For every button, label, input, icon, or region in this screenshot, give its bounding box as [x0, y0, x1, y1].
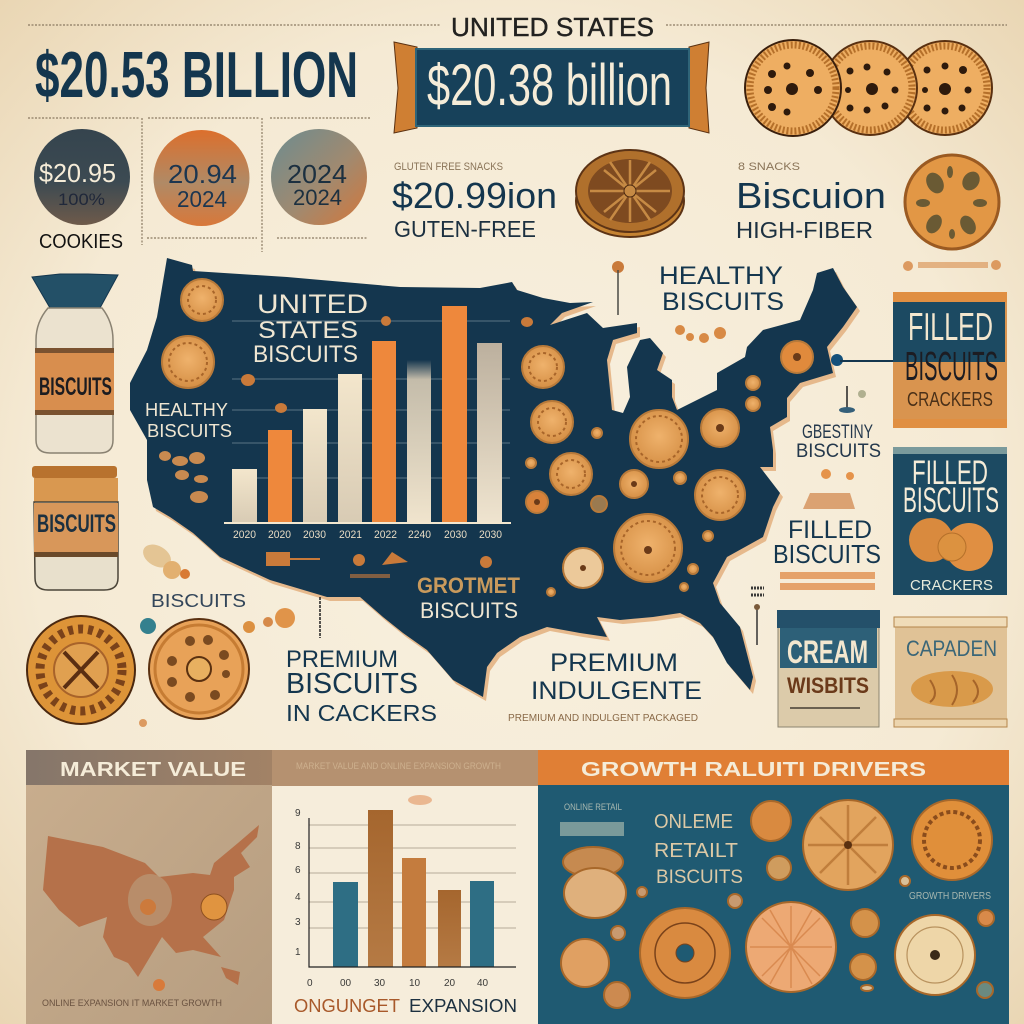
jar: biscuits top: BISCUITS	[39, 373, 112, 401]
stat circle: cookies: 100%	[58, 190, 105, 209]
label: healthy biscuits right	[659, 262, 784, 316]
stat circle: cookies: $20.95	[39, 158, 116, 188]
stat: gluten-free: GLUTEN FREE SNACKS	[394, 161, 503, 173]
panel: market value	[26, 750, 272, 1024]
map cookies	[162, 279, 813, 596]
panel: bar chart expansion	[272, 750, 538, 1024]
banner: value ribbon: $20.38 billion	[427, 53, 672, 118]
jar: biscuits bottom: BISCUITS	[37, 510, 116, 538]
icon: round biscuit	[576, 150, 684, 237]
stat circle: 2024 orange: 2024	[177, 186, 227, 212]
heading: united states: UNITED STATES	[451, 12, 654, 42]
driver cookies	[561, 800, 994, 1008]
driver cookie patterns	[655, 805, 980, 988]
caption: fine print: PREMIUM AND INDULGENT PACKAGED	[508, 713, 698, 724]
label: gbestiny biscuits: GBESTINY	[802, 422, 873, 443]
panel: bar chart expansion: 30	[374, 978, 386, 989]
jar: biscuits top	[32, 274, 118, 453]
stat: gluten-free: $20.99ion	[392, 175, 557, 216]
label: premium biscuits in crackers: BISCUITS	[286, 668, 418, 700]
stat: gluten-free	[392, 161, 557, 242]
panel: bar chart expansion: 40	[477, 978, 489, 989]
panel: growth drivers: GROWTH RALUITI DRIVERS	[581, 759, 926, 781]
panel: bar chart expansion: 20	[444, 978, 456, 989]
panel: growth drivers: ONLEME	[654, 811, 733, 833]
pin: top connector	[612, 261, 624, 315]
label: gbestiny biscuits	[796, 422, 881, 462]
panel: growth drivers: GROWTH DRIVERS	[909, 891, 991, 902]
panel: bar chart expansion: 0	[307, 978, 313, 989]
map label: united states biscuits	[253, 289, 368, 368]
cookie details	[169, 286, 738, 575]
map label: healthy biscuits left: BISCUITS	[147, 421, 232, 441]
stat circle: 2024 teal: 2024	[293, 185, 342, 210]
icon: wheel biscuit	[905, 155, 999, 249]
label: gourmet biscuits: GROTMET	[417, 573, 521, 598]
label: premium biscuits in crackers: IN CACKERS	[286, 700, 437, 726]
cookie centers	[534, 353, 801, 571]
panel: growth drivers: ONLINE RETAIL	[564, 802, 622, 812]
panel: growth drivers	[538, 750, 1009, 1024]
panel: bar chart expansion: ONGUNGET	[294, 996, 400, 1016]
label: biscuits small: BISCUITS	[151, 591, 246, 611]
map label: healthy biscuits left	[145, 400, 232, 441]
bar chart: biscuits growth: 2022	[374, 529, 397, 541]
chart decorations	[241, 316, 533, 578]
stat circle: 2024 teal: 2024	[287, 159, 347, 189]
panel: growth drivers: RETAILT	[654, 840, 738, 862]
slab biscuit	[803, 493, 855, 509]
stat circle: 2024 teal	[271, 129, 367, 225]
label: filled biscuits: FILLED	[788, 516, 872, 544]
label: gourmet biscuits: BISCUITS	[420, 598, 518, 623]
stat: high-fiber: Biscuion	[736, 175, 886, 216]
heading: market value: $20.53 BILLION	[35, 38, 358, 111]
bar chart: biscuits growth: 2020	[268, 529, 291, 541]
stat: high-fiber: 8 SNACKS	[738, 161, 800, 173]
map label: united states biscuits: BISCUITS	[253, 341, 358, 368]
panel: bar chart expansion: 4	[295, 892, 301, 903]
orange crumbs	[821, 469, 854, 480]
label: filled biscuits: BISCUITS	[773, 539, 881, 569]
panel: bar chart expansion: MARKET VALUE AND ONLINE EXPANSION GROWTH	[296, 761, 501, 771]
small biscuit decoration	[139, 540, 190, 579]
label: healthy biscuits right: HEALTHY	[659, 262, 783, 290]
package: cream biscuits	[777, 610, 880, 727]
panel: bar chart expansion: 10	[409, 978, 421, 989]
label: premium biscuits in crackers	[286, 646, 437, 726]
package: filled biscuits crackers blue	[893, 447, 1007, 595]
bar chart: biscuits growth: 2030	[479, 529, 502, 541]
package: cream biscuits: WISBITS	[787, 673, 869, 698]
panel: bar chart expansion: 8	[295, 841, 301, 852]
package: cream biscuits: CREAM	[787, 634, 868, 670]
dotted leader	[319, 597, 321, 638]
panel: bar chart expansion: 00	[340, 978, 352, 989]
package: caramel biscuits	[894, 617, 1007, 727]
icon: three crackers	[745, 40, 992, 136]
panel: bar chart expansion: 6	[295, 865, 301, 876]
panel: bar chart expansion: EXPANSION	[409, 996, 517, 1016]
dots around biscuits	[139, 608, 295, 727]
bar chart: biscuits growth: 2021	[339, 529, 362, 541]
icon: sunflower biscuit	[149, 619, 249, 719]
panel: market value: MARKET VALUE	[60, 759, 246, 781]
package: caramel biscuits: CAPADEN	[906, 636, 997, 661]
dots: near healthy biscuits	[675, 325, 726, 343]
map label: united states biscuits: STATES	[258, 317, 358, 344]
label: premium biscuits in crackers: PREMIUM	[286, 646, 398, 673]
label: gbestiny biscuits: BISCUITS	[796, 441, 881, 462]
icon: stamp biscuit	[27, 616, 135, 724]
label: healthy biscuits right: BISCUITS	[662, 288, 784, 316]
bar chart: biscuits growth: 2030	[444, 529, 467, 541]
panel: bar chart expansion: 3	[295, 917, 301, 928]
package: filled biscuits crackers blue: CRACKERS	[910, 577, 993, 594]
package: filled biscuits crackers top: CRACKERS	[907, 389, 993, 411]
pin: northeast	[839, 386, 866, 413]
orange text lines	[780, 572, 875, 590]
small map crumbs	[159, 451, 208, 503]
stat circle: cookies: COOKIES	[39, 231, 123, 253]
connector dot line	[831, 354, 893, 366]
map underlay	[133, 262, 860, 701]
stat circle: cookies	[34, 129, 130, 253]
stat circle: 2024 orange	[154, 130, 250, 226]
bar chart: biscuits growth: 2020	[233, 529, 256, 541]
bar chart: biscuits growth: 2240	[408, 529, 431, 541]
label: premium indulgente: INDULGENTE	[531, 677, 702, 705]
bar chart: biscuits growth: 2030	[303, 529, 326, 541]
label: filled biscuits	[773, 516, 881, 569]
stat: high-fiber: HIGH-FIBER	[736, 217, 873, 243]
pin: florida	[751, 588, 764, 645]
stat: gluten-free: GUTEN-FREE	[394, 216, 536, 242]
label: premium indulgente	[531, 649, 702, 705]
package: filled biscuits crackers blue: FILLED	[912, 454, 988, 492]
panel: bar chart expansion: 1	[295, 947, 301, 958]
panel: market value: ONLINE EXPANSION IT MARKET GROWTH	[42, 998, 222, 1008]
jar: biscuits bottom	[32, 466, 118, 590]
map label: united states biscuits: UNITED	[257, 289, 368, 319]
label: gourmet biscuits	[417, 573, 521, 623]
banner: value ribbon	[394, 42, 709, 133]
panel: bar chart expansion: 9	[295, 808, 301, 819]
bar chart: biscuits growth	[224, 306, 511, 541]
panel: growth drivers: BISCUITS	[656, 867, 743, 888]
label: premium indulgente: PREMIUM	[550, 649, 678, 677]
stat circle: 2024 orange: 20.94	[168, 159, 237, 189]
map: united states	[130, 258, 857, 697]
map label: healthy biscuits left: HEALTHY	[145, 400, 228, 420]
decoration above package	[903, 260, 1001, 271]
stat: high-fiber	[736, 161, 886, 243]
package: filled biscuits crackers top	[893, 292, 1007, 428]
